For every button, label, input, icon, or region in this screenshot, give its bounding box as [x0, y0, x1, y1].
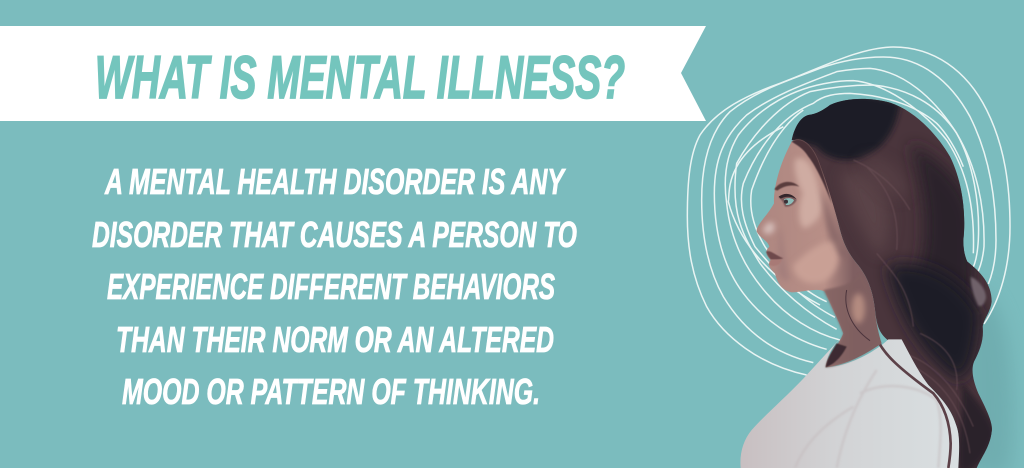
back hair shadow: [910, 143, 975, 316]
contour lines: [687, 47, 1010, 375]
neck highlight: [852, 293, 865, 323]
curl highlight: [971, 277, 986, 306]
loose hair strand: [846, 290, 870, 341]
sweater: [740, 339, 959, 468]
hairline: [792, 139, 832, 203]
drop shadow behind figure: [963, 290, 1013, 468]
lower hair shadow: [958, 380, 995, 468]
lips: [766, 251, 783, 266]
body paragraph: [92, 161, 577, 412]
title banner: [0, 26, 706, 121]
eyebrow: [774, 182, 799, 191]
collar shadow: [826, 343, 847, 367]
hair: [792, 98, 992, 468]
hair base: [792, 98, 992, 468]
title: WHAT IS MENTAL ILLNESS?: [95, 44, 625, 111]
body paragraph: THAN THEIR NORM OR AN ALTERED: [116, 319, 554, 360]
body paragraph: DISORDER THAT CAUSES A PERSON TO: [92, 214, 577, 255]
crown shadow: [790, 94, 900, 160]
eye: [778, 194, 797, 207]
hair highlight near face: [844, 173, 888, 247]
upper hair highlight: [872, 164, 898, 190]
central dark hair: [887, 264, 980, 380]
body paragraph: MOOD OR PATTERN OF THINKING.: [122, 371, 540, 412]
body paragraph: EXPERIENCE DIFFERENT BEHAVIORS: [107, 266, 555, 307]
sweater folds: [795, 370, 941, 468]
face and neck: [757, 139, 882, 367]
banner ribbon: [0, 26, 706, 121]
neck shadow: [823, 273, 880, 367]
hair strands: [853, 160, 973, 453]
face highlights: [763, 158, 847, 283]
body paragraph: A MENTAL HEALTH DISORDER IS ANY: [104, 161, 566, 202]
hair strand over sweater: [877, 338, 951, 468]
portrait with contour lines: [687, 47, 1013, 468]
